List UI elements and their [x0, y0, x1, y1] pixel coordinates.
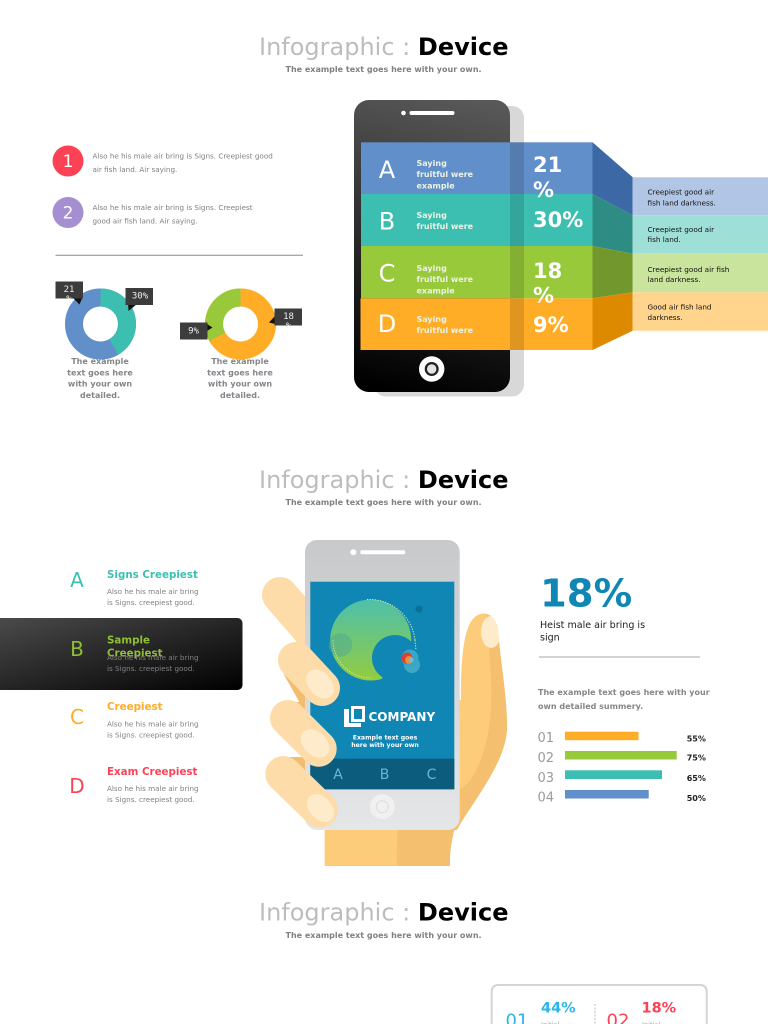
band C: land darkness.: [648, 275, 701, 284]
feature B: Also he his male air bring: [107, 653, 199, 662]
section 2 title: Infographic : Device: [259, 466, 508, 494]
white phone: B: [380, 767, 389, 783]
bar chart: 01: [538, 731, 554, 746]
summary text: own detailed summery.: [538, 702, 643, 711]
list item 2: Also he his male air bring is Signs. Creepiest: [92, 203, 253, 212]
band C: [361, 246, 768, 298]
donut chart 1: [56, 282, 153, 350]
summary text: The example text goes here with your: [538, 688, 710, 697]
list item 1: air fish land. Air saying.: [92, 165, 177, 174]
stats card: 18%: [642, 1000, 677, 1016]
donut caption 1: detailed.: [80, 391, 120, 400]
feature A: [70, 568, 199, 607]
band C: example: [416, 286, 455, 296]
feature D: Exam Creepiest: [107, 766, 198, 778]
band percentages: 18: [533, 259, 562, 283]
section 1 title: [259, 33, 508, 74]
big statistic: 18%: [540, 572, 632, 617]
donut caption 1: [67, 357, 133, 400]
callout 18%: 18: [283, 312, 294, 322]
list item 1: Also he his male air bring is Signs. Creepiest good: [92, 152, 273, 160]
band percentages: %: [533, 284, 554, 308]
band percentages: %: [533, 178, 554, 202]
band A: Creepiest good air: [648, 188, 714, 196]
band percentages: 21: [533, 153, 562, 177]
donut caption 2: with your own: [208, 380, 272, 389]
list item 1: [52, 146, 273, 176]
callout 21%: 21: [64, 285, 74, 295]
band percentages: 9%: [533, 313, 569, 337]
list item 2: good air fish land. Air saying.: [92, 216, 198, 226]
callout 18%: [269, 308, 302, 326]
section 3 subtitle: The example text goes here with your own.: [286, 931, 482, 940]
bar chart: 03: [538, 771, 554, 786]
donut caption 2: The example: [211, 357, 269, 366]
feature B: is Signs. creepiest good.: [107, 664, 195, 673]
band A: Saying: [416, 159, 447, 168]
callout 21%: [56, 282, 83, 304]
company logo: COMPANY: [368, 710, 435, 724]
feature A: Also he his male air bring: [107, 587, 199, 596]
donut caption 2: text goes here: [207, 368, 273, 377]
feature B: Creepiest: [107, 648, 163, 660]
company logo: [344, 706, 435, 749]
company logo: here with your own: [351, 742, 419, 749]
donut caption 1: The example: [71, 357, 129, 366]
feature C: Also he his male air bring: [107, 719, 199, 728]
app logo graphic: [329, 599, 422, 700]
feature B: B: [70, 637, 84, 661]
list item 1: 1: [63, 152, 73, 172]
bar chart: 02: [538, 751, 554, 766]
stats card: 44%: [541, 1000, 576, 1016]
feature A: Signs Creepiest: [107, 569, 198, 581]
feature B: [70, 634, 199, 673]
band C: C: [379, 260, 395, 288]
section 3 title: Infographic : Device: [259, 898, 508, 926]
band C: Saying: [416, 264, 447, 273]
bar chart: [538, 731, 706, 806]
section 1 subtitle: The example text goes here with your own.: [286, 65, 482, 74]
feature C: C: [70, 705, 84, 729]
section 2 subtitle: The example text goes here with your own.: [286, 498, 482, 507]
feature A: is Signs. creepiest good.: [107, 598, 195, 607]
big statistic: sign: [540, 632, 560, 643]
company logo: Example text goes: [353, 735, 418, 742]
list item 2: [52, 197, 253, 228]
section 1 title: Infographic : Device: [259, 33, 508, 61]
summary text: [538, 688, 710, 711]
donut caption 1: text goes here: [67, 368, 133, 377]
bar chart: 55%: [687, 734, 706, 744]
band percentages: 30%: [533, 208, 583, 232]
callout 30%: 30%: [132, 292, 149, 302]
donut caption 1: with your own: [68, 380, 132, 389]
feature C: is Signs. creepiest good.: [107, 730, 195, 740]
band D: [360, 292, 768, 350]
stats card: [492, 985, 707, 1024]
fingers over phone: [283, 660, 340, 827]
feature A: A: [70, 568, 84, 592]
white phone: [305, 540, 460, 830]
feature D: is Signs. creepiest good.: [107, 795, 195, 804]
callout 21%: %: [66, 294, 72, 304]
band C: Creepiest good air fish: [648, 265, 729, 274]
white phone: A: [333, 767, 343, 783]
list item 2: 2: [63, 204, 73, 224]
band B: [361, 194, 768, 254]
feature C: Creepiest: [107, 701, 163, 713]
band A: fish land darkness.: [648, 198, 716, 208]
band C: fruitful were: [416, 275, 474, 284]
band D: Saying: [416, 315, 447, 324]
black highlight bar: [0, 618, 242, 690]
band D: D: [378, 310, 396, 338]
feature B: Sample: [107, 634, 150, 646]
band A: fruitful were: [416, 170, 474, 179]
band A: example: [416, 182, 455, 190]
band A: A: [379, 156, 396, 184]
bar chart: 75%: [687, 754, 706, 762]
band D: Good air fish land: [648, 302, 712, 312]
big statistic: Heist male air bring is: [540, 620, 645, 631]
feature D: [69, 766, 199, 804]
callout 18%: %: [286, 322, 292, 332]
callout 9%: 9%: [188, 326, 199, 336]
hand behind phone: [280, 595, 507, 866]
white phone: C: [427, 767, 437, 783]
band percentages: [533, 153, 583, 337]
band B: fruitful were: [416, 222, 474, 231]
bar chart: 50%: [687, 794, 706, 803]
band B: Saying: [416, 211, 447, 220]
big statistic: [540, 572, 645, 643]
donut chart 2: [180, 298, 302, 350]
band A: [361, 142, 768, 215]
band D: darkness.: [648, 313, 683, 322]
band B: fish land.: [648, 235, 681, 244]
band B: B: [379, 208, 395, 236]
donut caption 2: [207, 357, 273, 400]
band D: fruitful were: [416, 326, 474, 335]
feature C: [70, 701, 199, 740]
donut caption 2: detailed.: [220, 391, 260, 400]
bar chart: 65%: [687, 774, 706, 783]
section 3 title: [259, 898, 508, 940]
bar chart: 04: [538, 790, 554, 806]
feature D: D: [69, 774, 85, 798]
band B: Creepiest good air: [648, 225, 714, 234]
black phone: [354, 100, 524, 396]
section 2 title: [259, 466, 508, 507]
feature D: Also he his male air bring: [107, 784, 199, 793]
